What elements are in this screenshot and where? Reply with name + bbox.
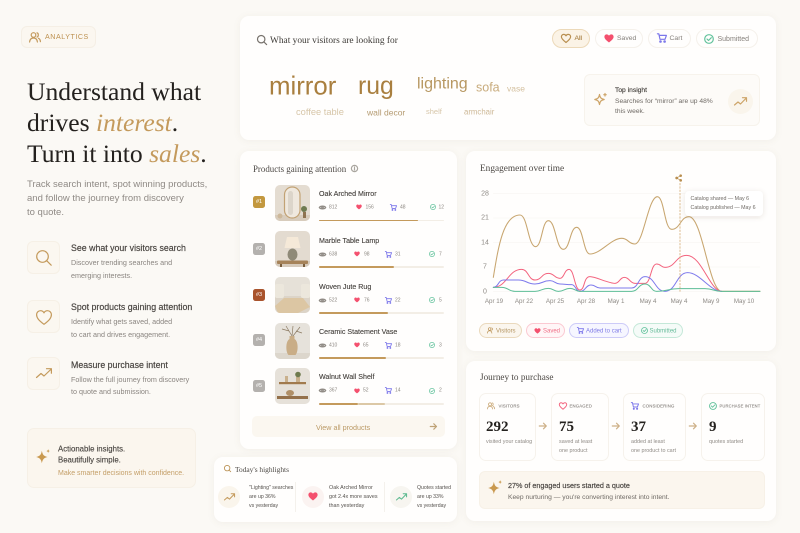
series: saved (493, 255, 722, 291)
x axis labels: Apr 25 (546, 298, 564, 305)
title (27, 77, 207, 168)
arrow (538, 422, 547, 430)
progress bar (319, 266, 444, 268)
word cloud: armchair (464, 108, 494, 117)
feature heading: Spot products gaining attention (71, 302, 192, 312)
stats row (318, 297, 442, 304)
legend: added to cart: Added to cart (586, 328, 622, 334)
icon: sparkle (594, 92, 607, 106)
highlight: quotes (390, 485, 451, 509)
legend: saved: Saved (543, 328, 560, 334)
card: purchase intent (701, 393, 765, 461)
stats row: 2 (439, 388, 442, 394)
highlight text: Quotes started (417, 485, 451, 491)
icon: sparkle (488, 480, 502, 494)
callout text: Beautifully simple. (58, 455, 121, 464)
stats row (318, 204, 444, 211)
word cloud: sofa (476, 80, 500, 94)
feature description: Discover trending searches and (71, 258, 172, 267)
card: engaged: saved at least (559, 439, 592, 445)
banner: quote insight (479, 471, 765, 509)
tooltip: Catalog shared — May 6 (690, 196, 749, 202)
highlight: lighting (218, 485, 294, 509)
icon: sparkle (36, 449, 50, 464)
feature: search (27, 241, 186, 280)
stats row: 31 (395, 251, 401, 257)
card: visitors: 292 (486, 418, 508, 434)
card: top insight: this week. (615, 108, 645, 115)
stats row: 48 (400, 204, 406, 210)
legend: visitors: Visitors (496, 328, 516, 334)
callout text (58, 444, 184, 477)
card: considering: 37 (631, 418, 646, 434)
arrow (688, 422, 697, 430)
progress bar (319, 357, 444, 359)
title: Turn it into sales. (27, 139, 207, 168)
legend: visitors (479, 323, 522, 338)
icon: heart circle (302, 486, 324, 508)
y axis labels (481, 190, 489, 295)
stats row: 156 (366, 204, 374, 210)
progress bar (319, 220, 444, 221)
panel heading: Products gaining attention (253, 164, 346, 174)
card: visitors: VISITORS (498, 403, 520, 408)
thumbnail: shelf (275, 368, 310, 404)
filter: submitted: Submitted (718, 36, 749, 43)
badge: analytics (21, 26, 96, 48)
insight text: Top insight (615, 87, 647, 94)
rank badge 1: #1 (256, 199, 262, 205)
stats row: 812 (329, 204, 337, 210)
thumbnail: vase (275, 323, 310, 359)
legend: saved (526, 323, 565, 338)
highlight: oak mirror: than yesterday (329, 503, 364, 509)
product name: Oak Arched Mirror (319, 190, 377, 198)
line chart (492, 174, 760, 292)
panel: products gaining attention (240, 151, 457, 449)
rank badge 4 (253, 334, 265, 346)
card: considering: CONSIDERING (642, 403, 674, 408)
icon: trend circle (390, 486, 412, 508)
feature: heart: to cart and drives engagement. (71, 329, 170, 338)
card: visitors (479, 393, 536, 461)
word cloud: wall decor (367, 107, 405, 117)
x axis labels: May 1 (608, 298, 624, 305)
arrow (612, 422, 620, 430)
rank badge 3 (253, 289, 265, 301)
highlight text: Oak Arched Mirror (329, 485, 373, 491)
word cloud: vase (507, 83, 525, 93)
rank badge 1 (253, 196, 265, 208)
card: considering (623, 393, 686, 461)
intro paragraph: and follow the journey from discovery (27, 193, 184, 204)
panel: search terms (240, 16, 776, 140)
stats row: 3 (439, 342, 442, 348)
intro paragraph: Track search intent, spot winning products, (27, 179, 207, 190)
stats row: 52 (363, 388, 369, 394)
stats row: 18 (395, 342, 401, 348)
x axis labels (485, 298, 754, 305)
filter: cart: Cart (670, 35, 682, 42)
stats row: 410 (329, 342, 337, 348)
legend: submitted: Submitted (650, 328, 677, 334)
title: Understand what (27, 77, 201, 106)
thumbnail: rug (275, 277, 310, 313)
marker line (679, 183, 681, 291)
word cloud: lighting (417, 76, 468, 92)
rank badge 2 (253, 243, 265, 255)
y axis labels: 7 (483, 264, 487, 270)
button: view all products: View all products (316, 422, 370, 431)
filter: submitted (696, 29, 758, 48)
feature description: Follow the full journey from discovery (71, 374, 189, 383)
stats row: 638 (329, 251, 337, 257)
product name: Marble Table Lamp (319, 237, 379, 245)
y axis labels: 28 (481, 190, 489, 197)
icon: search (27, 241, 60, 274)
feature: search: emerging interests. (71, 270, 132, 279)
stats row: 22 (395, 297, 401, 303)
x axis labels: May 4 (640, 298, 656, 305)
left column intro (21, 26, 207, 218)
legend: submitted (633, 323, 683, 338)
callout text: Actionable insights. (58, 444, 125, 453)
button: view all products (252, 416, 445, 437)
highlight text: "Lighting" searches (249, 485, 293, 491)
card: considering: added at least (631, 439, 665, 445)
x axis labels: May 4 (671, 298, 687, 305)
stats row: 98 (364, 251, 370, 257)
intro paragraph (27, 179, 207, 218)
stats row (318, 251, 442, 258)
x axis labels: Apr 19 (485, 298, 503, 305)
rank badge 4: #4 (256, 337, 262, 343)
filter: saved: Saved (617, 35, 636, 42)
highlights heading: Today's highlights (235, 465, 289, 474)
word cloud: rug (358, 73, 394, 100)
card: engaged: ENGAGED (570, 403, 592, 408)
stats row: 367 (329, 388, 337, 394)
legend: added to cart (569, 323, 629, 338)
panel heading: Journey to purchase (480, 371, 553, 381)
icon: trend circle (218, 486, 240, 508)
card: considering: one product to cart (631, 447, 676, 453)
feature: trend: to quote and submission. (71, 387, 151, 396)
word cloud: mirror (269, 72, 336, 100)
tooltip: Catalog published — May 6 (690, 205, 756, 211)
card: purchase intent: 9 (709, 418, 716, 434)
highlight: quotes: vs yesterday (417, 503, 446, 509)
product name: Walnut Wall Shelf (319, 373, 374, 381)
highlight: oak mirror (302, 485, 378, 509)
feature: heart (27, 300, 192, 338)
highlight: quotes: are up 33% (417, 494, 444, 500)
word cloud: coffee table (296, 106, 344, 116)
filter: all (552, 29, 590, 48)
panel heading: Engagement over time (480, 163, 564, 173)
feature heading: Measure purchase intent (71, 360, 168, 370)
product name: Woven Jute Rug (319, 283, 371, 291)
panel heading: What your visitors are looking for (270, 35, 398, 45)
stats row: 65 (363, 342, 369, 348)
filter: all: All (574, 35, 582, 42)
progress bar (319, 403, 444, 405)
icon: search (224, 465, 232, 472)
feature description: Identify what gets saved, added (71, 317, 172, 326)
badge: analytics: ANALYTICS (45, 32, 89, 40)
icon: trend (27, 357, 60, 390)
rank badge 2: #2 (256, 246, 262, 252)
rank badge 5: #5 (256, 383, 262, 389)
panel: journey to purchase (466, 361, 776, 521)
card: engaged: 75 (559, 418, 574, 434)
card: purchase intent: PURCHASE INTENT (720, 403, 760, 408)
highlight: lighting: vs yesterday (249, 503, 278, 509)
stats row: 7 (439, 251, 442, 257)
icon: trend circle (728, 89, 753, 114)
icon: search (256, 34, 268, 46)
x axis labels: Apr 28 (577, 298, 595, 305)
title: drives interest. (27, 108, 178, 137)
card: visitors: visited your catalog (486, 439, 532, 445)
filter: saved (595, 29, 643, 48)
rank badge 5 (253, 380, 265, 392)
callout: actionable insights (27, 428, 196, 488)
stats row: 522 (329, 297, 337, 303)
stats row: 12 (438, 204, 444, 210)
stats row (318, 387, 442, 394)
feature: trend (27, 357, 190, 396)
y axis labels: 14 (481, 239, 489, 246)
icon: share (676, 175, 682, 181)
highlight: lighting: are up 36% (249, 494, 276, 500)
card: purchase intent: quotes started (709, 439, 743, 445)
series: visitors (493, 197, 760, 291)
card: engaged (551, 393, 609, 461)
thumbnail: mirror (275, 185, 310, 221)
series: submitted (493, 284, 760, 291)
word cloud: shelf (426, 107, 442, 116)
intro paragraph: to quote. (27, 207, 64, 218)
filter: cart (648, 29, 691, 48)
stats row: 76 (364, 297, 370, 303)
x axis labels: May 10 (734, 298, 754, 305)
highlight: oak mirror: got 2.4x more saves (329, 494, 378, 500)
callout text: Make smarter decisions with confidence. (58, 470, 184, 477)
product name: Ceramic Statement Vase (319, 328, 397, 336)
tooltip (685, 191, 763, 216)
y axis labels: 21 (481, 214, 489, 222)
icon: info (350, 164, 358, 172)
icon: heart (27, 300, 60, 333)
x axis labels: Apr 22 (515, 298, 533, 305)
series: added to cart (493, 273, 722, 291)
stats row: 5 (439, 297, 442, 303)
feature heading: See what your visitors search (71, 243, 186, 253)
rank badge 3: #3 (256, 292, 262, 298)
card: top insight: Searches for “mirror” are up 48% (615, 98, 713, 105)
y axis labels: 0 (483, 288, 487, 295)
x axis labels: May 9 (703, 298, 719, 305)
card: top insight (584, 74, 760, 126)
stats row: 14 (395, 388, 401, 394)
word cloud (269, 72, 525, 117)
stats row (318, 342, 442, 349)
banner text: 27% of engaged users started a quote (508, 481, 630, 490)
thumbnail: lamp (275, 231, 310, 267)
banner: quote insight: Keep nurturing — you're converting interest into intent. (508, 494, 670, 501)
progress bar (319, 312, 444, 314)
card: engaged: one product (559, 447, 587, 453)
panel: today's highlights (214, 457, 457, 522)
panel: engagement over time (466, 151, 776, 351)
